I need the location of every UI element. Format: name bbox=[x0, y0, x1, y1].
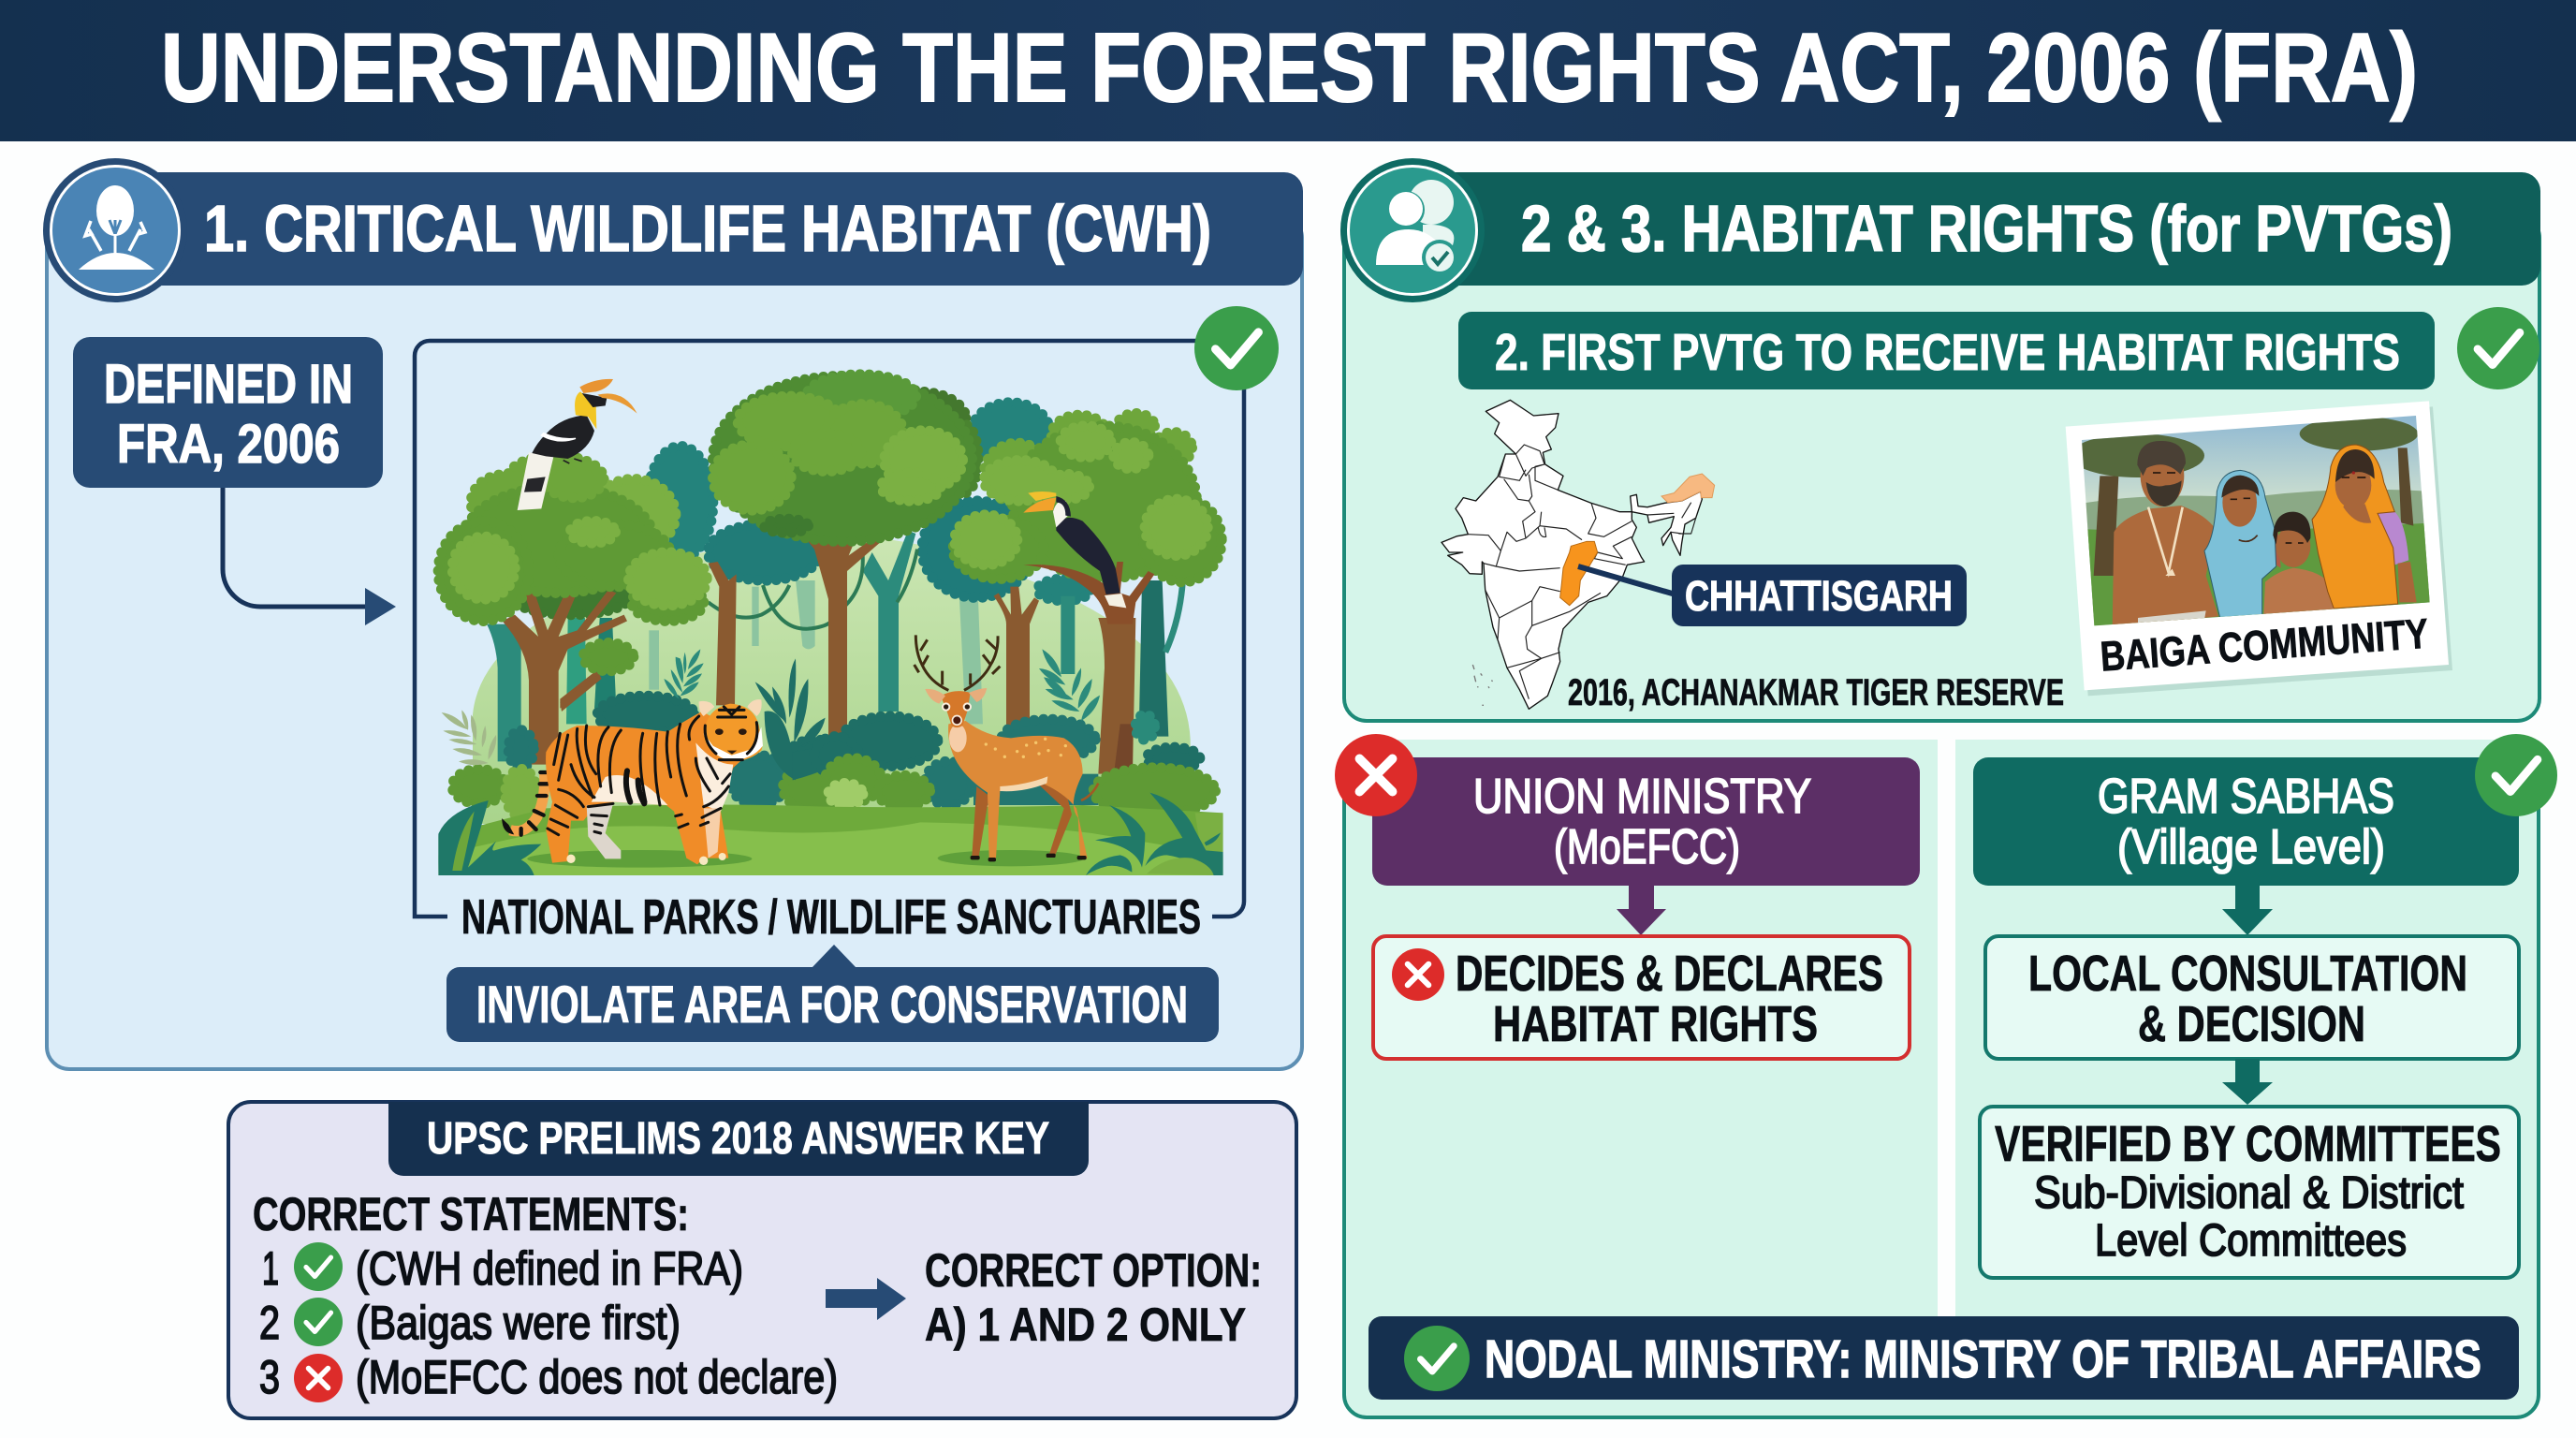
icon: wrong bbox=[1335, 734, 1417, 816]
check badge: habitat correct bbox=[1194, 306, 1279, 390]
panel: lower comparison bbox=[1335, 734, 2557, 1417]
map of India bbox=[1442, 400, 1715, 709]
arrow: union down bbox=[1617, 886, 1666, 935]
arrow: defined to habitat bbox=[223, 488, 396, 625]
box: verified by committees: Sub-Divisional & District bbox=[2034, 1168, 2464, 1218]
statement 2 bbox=[259, 1297, 681, 1349]
hornbill bird bbox=[518, 379, 637, 510]
statement 3: (MoEFCC does not declare) bbox=[356, 1351, 838, 1403]
tiger bbox=[503, 699, 763, 865]
box: decides and declares: DECIDES & DECLARES bbox=[1456, 946, 1883, 1002]
callout: defined in FRA: DEFINED IN bbox=[104, 354, 353, 415]
box: gram sabhas bbox=[1973, 757, 2519, 886]
box: local consultation bbox=[1985, 936, 2519, 1059]
deer bbox=[915, 635, 1098, 861]
label: Chhattisgarh bbox=[1672, 565, 1967, 626]
statement 1: (CWH defined in FRA) bbox=[356, 1242, 743, 1295]
heading tab: answer key: UPSC PRELIMS 2018 ANSWER KEY bbox=[427, 1114, 1049, 1164]
box: verified by committees bbox=[1980, 1107, 2519, 1278]
arrow: to correct option bbox=[826, 1278, 906, 1320]
statement 2: 2 bbox=[259, 1297, 280, 1349]
toucan bird bbox=[1023, 492, 1126, 608]
callout: defined in FRA bbox=[73, 337, 383, 488]
box: union ministry bbox=[1372, 757, 1920, 886]
box: union ministry: (MoEFCC) bbox=[1554, 820, 1740, 874]
box: verified by committees: Level Committees bbox=[2095, 1216, 2407, 1266]
panel header: habitat rights bbox=[1404, 172, 2540, 286]
illustration frame bbox=[415, 341, 1244, 917]
check badge: first PVTG bbox=[2457, 307, 2539, 389]
text: 2016 Achanakmar: 2016, ACHANAKMAR TIGER RESERVE bbox=[1568, 672, 2064, 713]
photo card: Baiga community: BAIGA COMMUNITY bbox=[2099, 611, 2430, 681]
panel: critical wildlife habitat bbox=[43, 158, 1303, 1069]
arrow: gram down bbox=[2222, 886, 2273, 935]
icon: tree on mound bbox=[43, 158, 187, 302]
panel: habitat rights upper bbox=[1340, 158, 2540, 721]
box: gram sabhas: (Village Level) bbox=[2117, 820, 2385, 874]
text: correct option bbox=[925, 1244, 1262, 1351]
column: gram sabhas bbox=[1973, 734, 2557, 1278]
statement 1: 1 bbox=[262, 1242, 279, 1295]
icon: people with check bbox=[1340, 158, 1485, 302]
text: correct option: A) 1 AND 2 ONLY bbox=[925, 1299, 1246, 1351]
sub heading: first PVTG bbox=[1458, 312, 2435, 389]
photo card: Baiga community bbox=[2066, 401, 2452, 696]
panel header: CWH: 1. CRITICAL WILDLIFE HABITAT (CWH) bbox=[204, 192, 1211, 265]
box: union ministry: UNION MINISTRY bbox=[1473, 770, 1811, 824]
panel: UPSC answer key bbox=[228, 1102, 1296, 1418]
text: correct option: CORRECT OPTION: bbox=[925, 1244, 1262, 1297]
pointer: map to Chhattisgarh bbox=[1578, 566, 1676, 594]
pointer and label: inviolate area: INVIOLATE AREA FOR CONSERVATION bbox=[476, 975, 1188, 1034]
statement 3: 3 bbox=[259, 1351, 280, 1403]
banner: nodal ministry bbox=[1368, 1316, 2519, 1400]
icon: correct bbox=[2475, 734, 2557, 816]
statement 2: (Baigas were first) bbox=[356, 1297, 681, 1349]
illustration: forest with wildlife bbox=[437, 374, 1223, 875]
label: Chhattisgarh: CHHATTISGARH bbox=[1685, 572, 1953, 620]
box: decides and declares bbox=[1373, 936, 1910, 1059]
pointer and label: inviolate area bbox=[446, 945, 1219, 1042]
heading tab: answer key bbox=[388, 1102, 1089, 1176]
caption: national parks: NATIONAL PARKS / WILDLIFE SANCTUARIES bbox=[461, 890, 1201, 945]
column: union ministry bbox=[1335, 734, 1920, 1059]
box: local consultation: & DECISION bbox=[2138, 996, 2365, 1052]
text: correct statements heading: CORRECT STATEMENTS: bbox=[253, 1188, 689, 1240]
panel header: CWH bbox=[94, 172, 1303, 286]
arrow: consultation down bbox=[2222, 1059, 2273, 1105]
box: gram sabhas: GRAM SABHAS bbox=[2098, 770, 2394, 824]
box: decides and declares: HABITAT RIGHTS bbox=[1493, 996, 1818, 1052]
statement 1 bbox=[262, 1242, 743, 1295]
callout: defined in FRA: FRA, 2006 bbox=[117, 414, 340, 475]
